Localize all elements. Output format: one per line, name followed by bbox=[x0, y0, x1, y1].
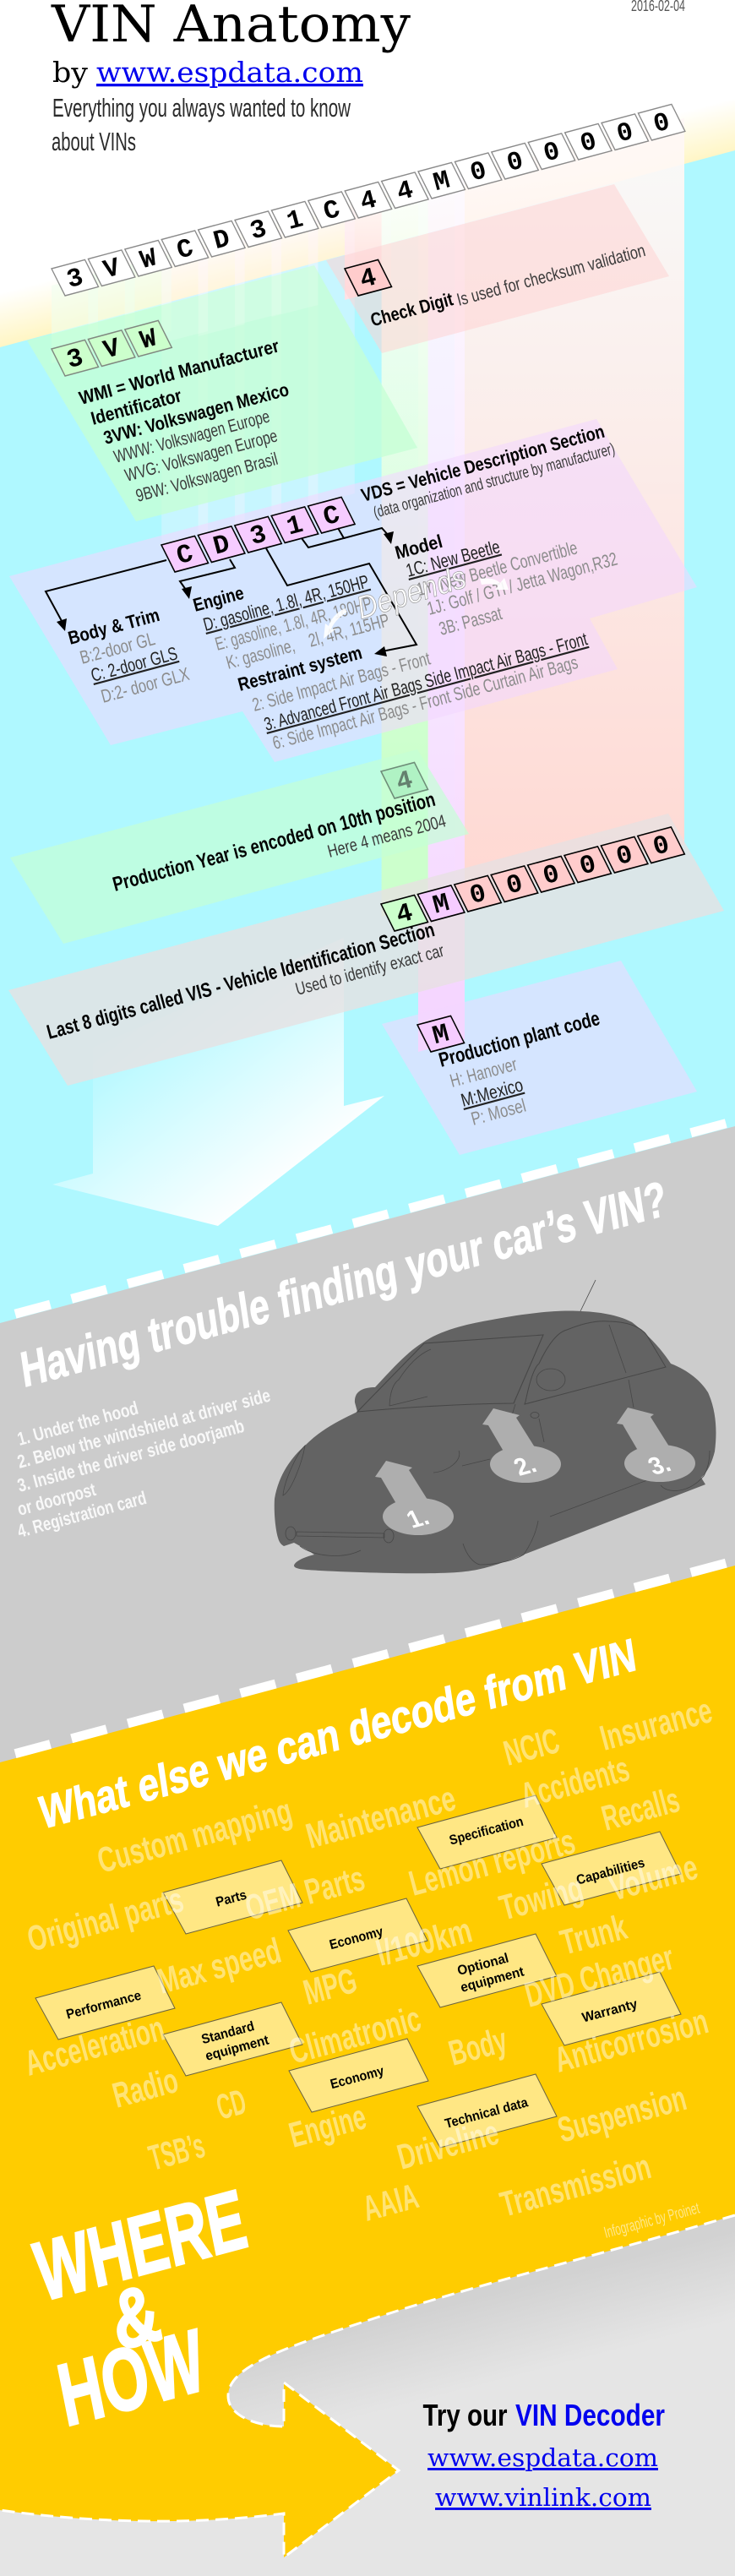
list of VIN locations: 2. Below the windshield at driver side bbox=[15, 1385, 273, 1473]
check digit text: Check Digit bbox=[368, 288, 455, 330]
panel: yellow decode section bbox=[0, 1566, 735, 2576]
model text: 1Y: New Beetle Convertible bbox=[414, 536, 580, 600]
production year box bbox=[381, 762, 427, 798]
VIS boxes: 0 bbox=[577, 850, 600, 883]
background: cyan section bbox=[0, 150, 735, 1326]
plant text: P: Mosel bbox=[469, 1095, 528, 1130]
note labels: Capabilities bbox=[575, 1856, 646, 1888]
depends label and arrows: Depends bbox=[352, 560, 471, 627]
yellow notes bbox=[35, 1795, 681, 2148]
WMI boxes: V bbox=[101, 334, 123, 367]
VDS boxes: C bbox=[320, 500, 343, 533]
VDS boxes: 3 bbox=[247, 520, 270, 553]
panel: gray find-your-VIN section bbox=[0, 1126, 735, 1774]
VIS boxes: 0 bbox=[540, 859, 563, 892]
faded decode words: Volume bbox=[605, 1847, 702, 1909]
model text: 1C: New Beetle bbox=[404, 536, 502, 581]
dashed border yellow section bbox=[15, 1560, 735, 1754]
VIN row: 0 bbox=[651, 107, 673, 140]
arrow marker 2 bbox=[482, 1408, 561, 1483]
note labels: equipment bbox=[459, 1964, 526, 1996]
faded decode words: OEM Parts bbox=[241, 1858, 368, 1928]
faded decode words: Towing bbox=[495, 1867, 587, 1928]
faded decode words: l/100km bbox=[372, 1910, 476, 1974]
VDS text bbox=[359, 421, 617, 522]
production year text bbox=[111, 788, 449, 896]
faded decode words bbox=[20, 1690, 716, 2229]
VIS text: Last 8 digits called VIS - Vehicle Identification Section bbox=[45, 918, 437, 1044]
subtitle: about VINs bbox=[52, 127, 136, 156]
note labels: Economy bbox=[329, 2064, 386, 2092]
plant text: M:Mexico bbox=[459, 1074, 525, 1111]
faded decode words: Accidents bbox=[516, 1748, 634, 1816]
faded decode words: Max speed bbox=[153, 1931, 285, 2001]
VIN row: 4 bbox=[394, 176, 416, 209]
restraint system text: 3: Advanced Front Air Bags Side Impact Air Bags - Front bbox=[262, 628, 590, 735]
VDS text: VDS = Vehicle Description Section bbox=[359, 421, 607, 506]
arrow marker 3 bbox=[617, 1408, 695, 1482]
faint beam tails over WMI panel bbox=[161, 221, 318, 343]
VIN row: M bbox=[431, 166, 454, 199]
VIN row: 0 bbox=[614, 117, 637, 150]
faded decode words: Maintenance bbox=[302, 1778, 460, 1856]
body and trim text: Body & Trim bbox=[66, 604, 162, 649]
VIS boxes: 4 bbox=[394, 898, 416, 931]
faded decode words: Driveline bbox=[393, 2112, 503, 2177]
VIS boxes: 0 bbox=[650, 831, 672, 863]
list of VIN locations: 3. Inside the driver side doorjamb bbox=[15, 1415, 247, 1496]
list of VIN locations: or doorpost bbox=[15, 1479, 99, 1520]
dashed border gray section bbox=[15, 1121, 735, 1314]
note labels: Performance bbox=[65, 1989, 143, 2023]
VDS boxes: C bbox=[174, 539, 197, 572]
faded decode words: Acceleration bbox=[20, 2008, 169, 2083]
list of VIN locations: 4. Registration card bbox=[15, 1487, 149, 1542]
plant box bbox=[417, 1016, 465, 1052]
body and trim text: C: 2-door GLS bbox=[89, 643, 180, 686]
VIN row: W bbox=[137, 243, 161, 276]
VIN row: 0 bbox=[541, 137, 564, 170]
VIS boxes: 0 bbox=[466, 879, 489, 912]
faded decode words: Recalls bbox=[597, 1779, 683, 1838]
production year box: 4 bbox=[394, 765, 416, 798]
faded decode words: Trunk bbox=[556, 1907, 631, 1963]
faded decode words: NCIC bbox=[499, 1720, 564, 1773]
WMI text bbox=[77, 335, 291, 506]
white down arrow bbox=[52, 938, 384, 1226]
VIN row: V bbox=[101, 253, 123, 286]
VIN row: C bbox=[320, 195, 343, 228]
panel: WMI bbox=[27, 265, 417, 521]
list of VIN locations bbox=[15, 1385, 273, 1542]
subtitle bbox=[52, 93, 351, 156]
VIN row: 0 bbox=[504, 146, 526, 179]
faded decode words: Engine bbox=[285, 2096, 370, 2155]
link: vinlink: www.vinlink.com bbox=[435, 2483, 651, 2512]
faded decode words: Lemon reports bbox=[405, 1821, 579, 1903]
note labels: equipment bbox=[204, 2033, 271, 2064]
arrow marker 1 bbox=[375, 1461, 454, 1535]
engine text: D: gasoline, 1.8l, 4R, 150HP bbox=[201, 570, 371, 635]
arrow marker 1: 1. bbox=[402, 1504, 434, 1534]
car illustration bbox=[275, 1280, 716, 1573]
VIN row: 3 bbox=[64, 263, 87, 296]
body and trim text bbox=[66, 604, 192, 707]
plant text: Production plant code bbox=[437, 1007, 602, 1072]
VIN row: 0 bbox=[467, 156, 490, 189]
faded decode words: Custom mapping bbox=[93, 1790, 296, 1881]
production year text: Here 4 means 2004 bbox=[325, 811, 449, 862]
model text: 3B: Passat bbox=[437, 602, 504, 640]
VDS boxes: D bbox=[210, 530, 233, 563]
engine text: E: gasoline, 1.8l, 4R, 180HP bbox=[213, 592, 374, 655]
VIN row bbox=[52, 104, 685, 296]
light beams from the VIN row bbox=[52, 118, 684, 1052]
check digit box: 4 bbox=[357, 263, 380, 296]
VIS text bbox=[45, 918, 446, 1044]
panel: production plant bbox=[382, 961, 697, 1155]
model text bbox=[393, 531, 619, 640]
plant text bbox=[437, 1007, 602, 1130]
subtitle: Everything you always wanted to know bbox=[52, 93, 351, 123]
VIN row: C bbox=[174, 234, 197, 267]
faded decode words: Climatronic bbox=[285, 1998, 425, 2072]
VIS boxes: 0 bbox=[504, 869, 526, 902]
restraint system text: Restraint system bbox=[236, 642, 364, 695]
VIN row: 3 bbox=[248, 215, 270, 248]
model text: Model bbox=[393, 531, 444, 564]
panel: production year bbox=[10, 749, 469, 944]
background: page white with pale yellow band bbox=[0, 0, 735, 363]
VDS text: (data organization and structure by manufacturer) bbox=[372, 440, 617, 522]
heading: where and how: WHERE bbox=[28, 2172, 253, 2319]
WMI boxes bbox=[52, 320, 172, 376]
WMI text: Identificator bbox=[89, 384, 184, 429]
engine text: K: gasoline, 2l, 4R, 115HP bbox=[224, 609, 392, 673]
arrow marker 2: 2. bbox=[509, 1451, 542, 1482]
depends label and arrows bbox=[324, 560, 509, 639]
note labels: Specification bbox=[448, 1815, 525, 1849]
panel: VIS bbox=[8, 814, 724, 1086]
VIS boxes: 0 bbox=[613, 840, 636, 873]
VIS boxes: M bbox=[430, 889, 453, 922]
heading: where and how: HOW bbox=[51, 2311, 213, 2445]
panel: VDS bbox=[9, 419, 697, 762]
arrow marker 3: 3. bbox=[644, 1451, 676, 1481]
byline: www.espdata.com bbox=[96, 56, 363, 89]
faded decode words: Radio bbox=[108, 2060, 182, 2116]
faded decode words: AAIA bbox=[358, 2176, 422, 2229]
check digit box bbox=[345, 259, 392, 296]
VIN row: 0 bbox=[577, 127, 600, 160]
WMI boxes: 3 bbox=[64, 343, 87, 376]
faded decode words: CD bbox=[212, 2081, 250, 2127]
WMI boxes: W bbox=[137, 324, 161, 357]
check digit text bbox=[368, 241, 647, 330]
body and trim text: B:2-door GL bbox=[78, 628, 157, 668]
VDS boxes: 1 bbox=[284, 510, 307, 543]
note labels bbox=[65, 1815, 646, 2132]
note labels: Standard bbox=[200, 2019, 256, 2047]
heading: where and how: & bbox=[104, 2266, 167, 2367]
restraint system text bbox=[236, 628, 590, 754]
connector arrows bbox=[46, 528, 416, 656]
check digit text: Is used for checksum validation bbox=[455, 241, 647, 310]
link: espdata: www.espdata.com bbox=[427, 2443, 658, 2472]
engine text bbox=[191, 570, 392, 673]
plant box: M bbox=[430, 1019, 453, 1052]
VIN row: 1 bbox=[284, 204, 307, 237]
body and trim text: D:2- door GLX bbox=[99, 663, 192, 707]
call to action text: Try our bbox=[422, 2398, 507, 2432]
faded decode words: Transmission bbox=[496, 2146, 655, 2225]
VIN row: 4 bbox=[357, 185, 380, 218]
dashed arrow outline bbox=[0, 2215, 735, 2557]
call to action text bbox=[422, 2398, 665, 2432]
faded decode words: MPG bbox=[299, 1960, 361, 2012]
WMI text: 3VW: Volkswagen Mexico bbox=[101, 379, 291, 449]
note labels: Parts bbox=[215, 1888, 248, 1910]
WMI text: 9BW: Volkswagen Brasil bbox=[133, 449, 280, 506]
restraint system text: 2: Side Impact Air Bags - Front bbox=[250, 648, 433, 716]
VIS text: Used to identify exact car bbox=[293, 941, 446, 999]
list of VIN locations: 1. Under the hood bbox=[15, 1397, 140, 1450]
faded decode words: Original parts bbox=[23, 1879, 188, 1959]
restraint system text: 6: Side Impact Air Bags - Front Side Curtain Air Bags bbox=[270, 651, 580, 754]
byline: by bbox=[52, 56, 88, 89]
WMI text: WWW: Volkswagen Europe bbox=[112, 406, 272, 467]
VIN row: D bbox=[210, 224, 233, 257]
note labels: Technical data bbox=[444, 2095, 530, 2132]
engine text: Engine bbox=[191, 582, 246, 616]
heading: where and how bbox=[28, 2172, 253, 2445]
note labels: Optional bbox=[456, 1951, 510, 1979]
panel: bottom call-to-action with yellow arrow bbox=[0, 2215, 735, 2576]
VDS boxes bbox=[161, 497, 355, 572]
WMI text: WMI = World Manufacturer bbox=[77, 335, 281, 409]
faded decode words: TSB’s bbox=[144, 2125, 209, 2178]
WMI text: WVG: Volkswagen Europe bbox=[122, 426, 280, 486]
VIS boxes bbox=[381, 827, 684, 931]
note labels: Warranty bbox=[580, 1997, 639, 2026]
note labels: Economy bbox=[328, 1925, 385, 1952]
panel: check digit bbox=[326, 184, 669, 353]
plant text: H: Hanover bbox=[448, 1054, 520, 1092]
call to action text: VIN Decoder bbox=[515, 2398, 665, 2432]
faded decode words: Body bbox=[444, 2019, 511, 2073]
model text: 1J: Golf / GTI / Jetta Wagon,R32 bbox=[425, 548, 619, 619]
production year text: Production Year is encoded on 10th position bbox=[111, 788, 438, 896]
